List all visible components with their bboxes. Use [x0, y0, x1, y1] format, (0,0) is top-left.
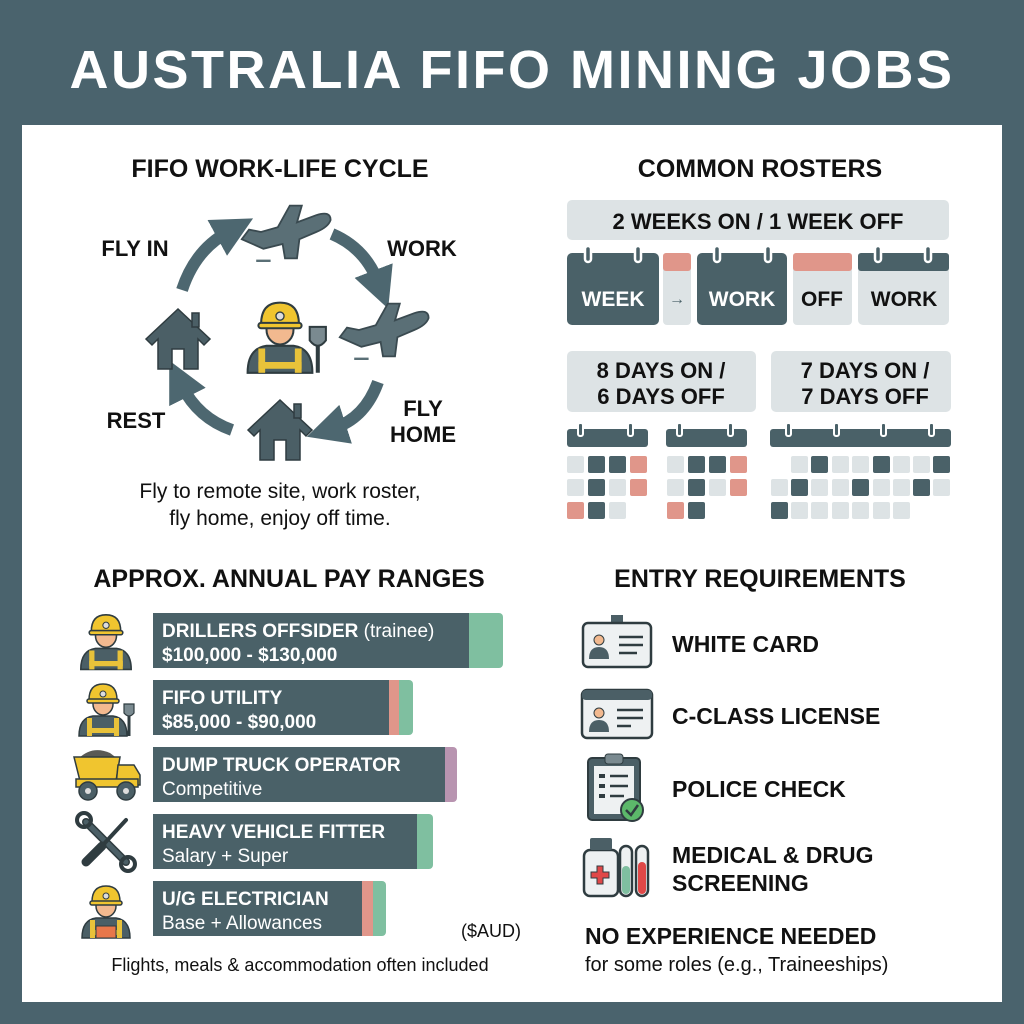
- panel: rosters: 2 WEEKS ON / 1 WEEK OFF: [613, 209, 903, 234]
- bar: dump truck: [153, 747, 457, 802]
- bar: drillers offsider: [153, 613, 503, 668]
- note: no experience: NO EXPERIENCE NEEDED: [585, 923, 876, 949]
- labels cycle: FLY: [403, 396, 443, 421]
- icon: plane top: [242, 206, 331, 261]
- labels cycle: REST: [107, 408, 166, 433]
- bar: fifo utility: [153, 680, 413, 735]
- icon: tools: [77, 813, 135, 871]
- icon: worker 2: [79, 684, 134, 736]
- caption cycle: Fly to remote site, work roster,: [139, 480, 421, 503]
- mini calendars: [567, 423, 951, 519]
- panel: rosters: [567, 155, 951, 519]
- item: white card: WHITE CARD: [672, 631, 819, 657]
- heading: entry: ENTRY REQUIREMENTS: [614, 565, 906, 593]
- icon: worker 1: [81, 615, 131, 669]
- calendar row: [567, 253, 949, 325]
- panel: rosters: 6 DAYS OFF: [597, 384, 725, 409]
- note: no experience: [585, 923, 888, 976]
- bar: ug electrician: U/G ELECTRICIAN: [162, 889, 329, 910]
- heading: rosters: COMMON ROSTERS: [638, 155, 882, 183]
- item: white card: [583, 615, 819, 667]
- arrows cycle: [182, 232, 378, 430]
- roster 2on1off: [567, 200, 949, 240]
- note: AUD: ($AUD): [461, 921, 521, 941]
- title: AUSTRALIA FIFO MINING JOBS: [70, 40, 954, 100]
- calendar row: WORK: [871, 288, 937, 311]
- item: medical: MEDICAL & DRUG: [672, 842, 873, 868]
- calendar row: WORK: [709, 288, 775, 311]
- bar: drillers offsider: DRILLERS OFFSIDER (trainee): [162, 621, 434, 642]
- bar: dump truck: Competitive: [162, 779, 262, 800]
- bar: heavy vehicle fitter: HEAVY VEHICLE FITTER: [162, 822, 385, 843]
- item: police check: POLICE CHECK: [672, 776, 846, 802]
- item: medical: [584, 838, 873, 896]
- icon: dump truck: [74, 750, 140, 800]
- bar: ug electrician: Base + Allowances: [162, 913, 322, 934]
- panel: entry requirements: [582, 565, 906, 976]
- panel: work-life cycle: fly home, enjoy off time.: [169, 507, 391, 530]
- icon: house bottom: [248, 400, 312, 460]
- panel: rosters: 7 DAYS OFF: [801, 384, 929, 409]
- bar: fifo utility: FIFO UTILITY: [162, 688, 283, 709]
- item: police check: [588, 754, 846, 821]
- labels cycle: HOME: [390, 422, 456, 447]
- calendar row: WEEK: [582, 288, 644, 311]
- bar: drillers offsider: $100,000 - $130,000: [162, 645, 337, 666]
- icon: worker 3: [82, 886, 130, 938]
- note: no experience: for some roles (e.g., Traineeships): [585, 954, 888, 976]
- calendar row: OFF: [801, 288, 843, 311]
- icon: house left: [146, 309, 210, 369]
- item: medical: SCREENING: [672, 870, 809, 896]
- heading: cycle: FIFO WORK-LIFE CYCLE: [131, 155, 429, 183]
- bar: fifo utility: $85,000 - $90,000: [162, 712, 316, 733]
- labels cycle: FLY IN: [101, 236, 169, 261]
- labels cycle: WORK: [387, 236, 457, 261]
- item: c-class license: C-CLASS LICENSE: [672, 703, 880, 729]
- bar: heavy vehicle fitter: Salary + Super: [162, 846, 289, 867]
- panel: rosters: 7 DAYS ON /: [801, 358, 929, 383]
- footnote: pay: Flights, meals & accommodation often included: [111, 955, 489, 975]
- bar: dump truck: DUMP TRUCK OPERATOR: [162, 755, 401, 776]
- bar: heavy vehicle fitter: [153, 814, 433, 869]
- bar: ug electrician: [153, 881, 386, 936]
- icon: plane right: [340, 304, 429, 359]
- labels cycle: [101, 236, 457, 447]
- roster 8on6off: [567, 351, 756, 412]
- panel: work-life cycle: [101, 155, 457, 530]
- item: c-class license: [582, 690, 880, 738]
- panel: rosters: 8 DAYS ON /: [597, 358, 725, 383]
- calendar row: →: [669, 291, 685, 308]
- panel: pay ranges: [74, 565, 521, 975]
- icon: worker: [248, 303, 326, 373]
- heading: pay: APPROX. ANNUAL PAY RANGES: [93, 565, 485, 593]
- roster 7on7off: [771, 351, 951, 412]
